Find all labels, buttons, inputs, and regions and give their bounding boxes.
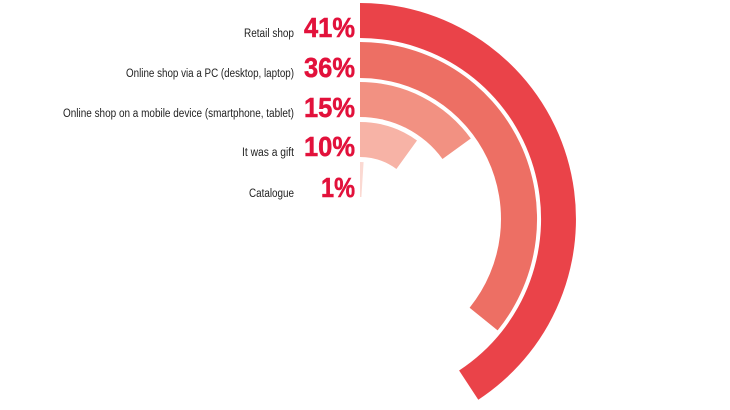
value: 10% xyxy=(304,131,355,162)
value: 15% xyxy=(304,92,355,123)
row: online shop on a mobile device xyxy=(63,92,355,123)
row: catalogue xyxy=(249,172,355,203)
value: 36% xyxy=(304,52,355,83)
bar: retail shop 41% xyxy=(360,3,576,400)
label: Retail shop xyxy=(244,28,294,40)
label: Online shop via a PC (desktop, laptop) xyxy=(126,68,294,80)
value: 1% xyxy=(321,172,355,203)
row: retail shop xyxy=(244,12,355,43)
bar: online shop on mobile 15% xyxy=(360,82,471,159)
bar: it was a gift 10% xyxy=(360,122,417,169)
label: Online shop on a mobile device (smartphone, tablet) xyxy=(63,108,294,120)
radial bars xyxy=(360,3,576,400)
value: 41% xyxy=(304,12,355,43)
row: it was a gift xyxy=(242,131,355,162)
row: online shop via a PC xyxy=(126,52,355,83)
bar: online shop via PC 36% xyxy=(360,42,537,330)
label: It was a gift xyxy=(242,147,295,159)
bar: catalogue 1% xyxy=(360,162,364,197)
label: Catalogue xyxy=(249,188,294,200)
